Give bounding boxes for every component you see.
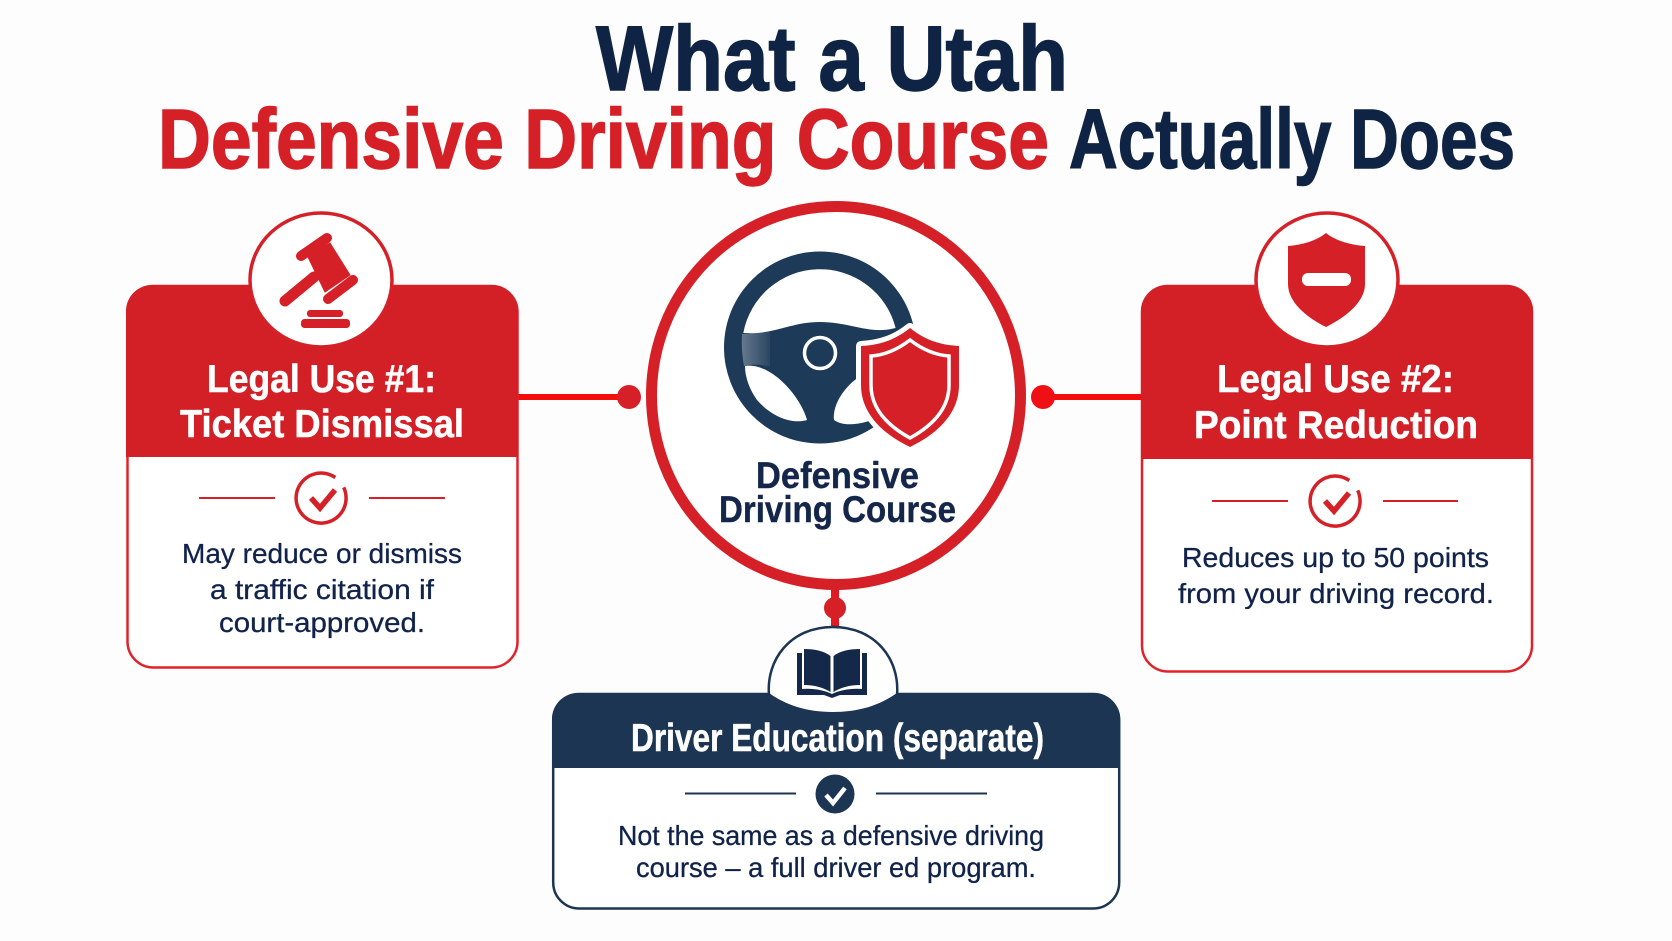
body text: legal use 2: Reduces up to 50 points <box>1182 542 1489 573</box>
heading: driver education: Driver Education (separate) <box>631 717 1044 760</box>
heading: legal use 1: Ticket Dismissal <box>180 403 464 446</box>
label: center: Defensive <box>756 455 919 496</box>
check divider: driver education <box>685 774 987 814</box>
panel: driver education <box>552 626 1120 908</box>
bottom connector <box>824 585 846 629</box>
icon: steering wheel <box>724 252 916 444</box>
right connector <box>1031 385 1143 409</box>
icon: book <box>769 626 897 712</box>
check divider: legal use 2 <box>1212 476 1458 526</box>
body text: legal use 1: May reduce or dismiss <box>182 538 462 569</box>
body text: legal use 2 <box>1178 542 1494 609</box>
body text: legal use 1: court-approved. <box>219 607 425 638</box>
title <box>158 8 1515 186</box>
card header: legal use 2 <box>1141 285 1533 459</box>
panel: legal use 2 <box>1141 213 1533 672</box>
body text: legal use 2: from your driving record. <box>1178 578 1494 609</box>
icon: shield <box>861 328 959 447</box>
body text: driver education: course – a full driver ed program. <box>636 852 1036 883</box>
body text: legal use 1: a traffic citation if <box>210 574 434 605</box>
label: center <box>719 455 956 530</box>
check divider: legal use 1 <box>199 473 445 523</box>
body text: driver education: Not the same as a defensive driving <box>618 820 1044 851</box>
label: center: Driving Course <box>719 489 956 530</box>
panel: center circle <box>652 206 1020 584</box>
heading: legal use 2: Point Reduction <box>1194 404 1478 447</box>
icon: shield with minus <box>1256 213 1398 347</box>
card header: driver education <box>552 693 1120 768</box>
panel: legal use 1 <box>126 213 518 668</box>
heading: legal use 1 <box>180 358 464 446</box>
body text: legal use 1 <box>182 538 462 638</box>
left connector <box>516 385 641 409</box>
title: What a Utah <box>596 8 1068 110</box>
body text: driver education <box>618 820 1044 883</box>
heading: legal use 1: Legal Use #1: <box>207 358 436 401</box>
title: Actually Does <box>1069 92 1515 186</box>
icon: gavel <box>250 213 392 347</box>
heading: legal use 2: Legal Use #2: <box>1217 358 1454 401</box>
title: Defensive Driving Course <box>158 92 1049 186</box>
heading: legal use 2 <box>1194 358 1478 447</box>
card header: legal use 1 <box>126 285 518 457</box>
